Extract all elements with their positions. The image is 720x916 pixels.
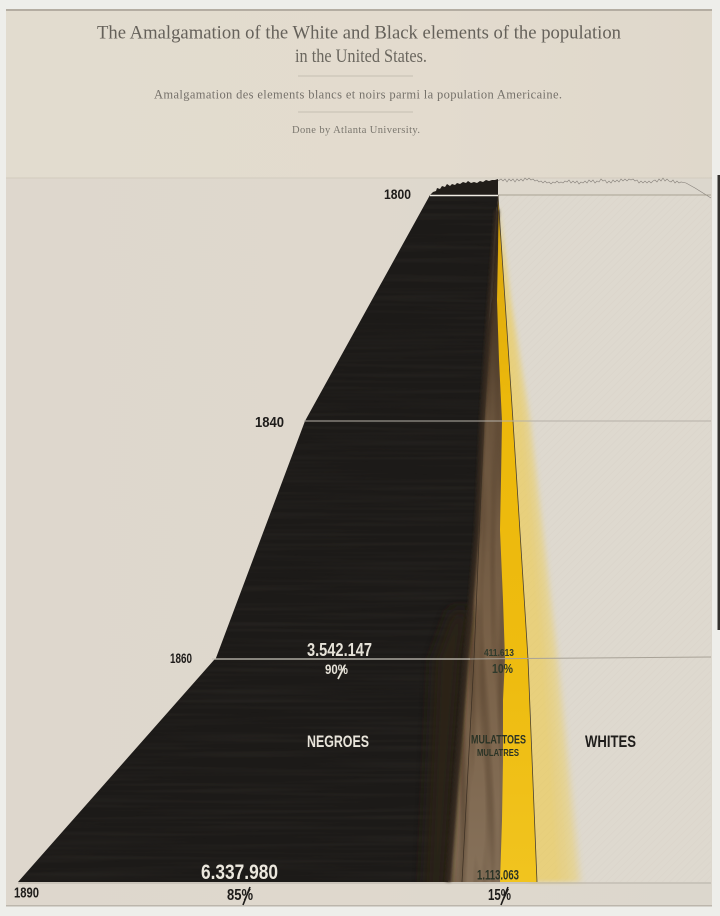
pale yellow wash — [499, 205, 583, 882]
mulatto brown band — [440, 195, 506, 882]
wavy white top outline — [498, 178, 711, 198]
1890 negro population: 6.337.980 — [201, 861, 278, 884]
title: The Amalgamation of the White and Black elements of the population — [97, 24, 621, 44]
year rule 1800 — [430, 194, 498, 196]
1860 mulatto population — [484, 647, 514, 676]
inner pencil line in brown band — [462, 195, 498, 882]
chart: population streams — [18, 178, 711, 900]
year label 1800: 1800 — [384, 186, 411, 202]
1860 negro population — [307, 640, 372, 679]
1860 negro population: 3.542.147 — [307, 640, 372, 660]
strong yellow band — [497, 195, 537, 882]
label: mulattoes — [471, 734, 526, 759]
label: negroes: NEGROES — [307, 732, 369, 751]
label: mulattoes: MULATTOES — [471, 734, 526, 746]
title — [97, 24, 621, 67]
jagged top of 1800 block — [430, 179, 498, 195]
1860 negro population: 90% — [325, 661, 348, 677]
1890 negro percentage: 85% — [227, 887, 253, 904]
year rule 1860 — [212, 657, 711, 659]
year label 1840: 1840 — [255, 415, 284, 431]
year label 1860: 1860 — [170, 650, 192, 666]
whites stream with hatching — [498, 195, 711, 882]
soft edge black to brown — [424, 610, 470, 900]
label: mulattoes: MULATRES — [477, 748, 519, 759]
baseline 1890 — [18, 882, 711, 884]
label: whites: WHITES — [585, 732, 636, 751]
1860 mulatto population: 10% — [492, 661, 513, 676]
credit: Done by Atlanta University. — [292, 125, 420, 136]
year rule 1840 — [304, 420, 711, 422]
1860 mulatto population: 411.613 — [484, 647, 514, 659]
French subtitle: Amalgamation des elements blancs et noirs parmi la population Americaine. — [154, 88, 562, 102]
negroes stream — [18, 195, 498, 882]
title: in the United States. — [295, 47, 427, 67]
year label 1890: 1890 — [14, 886, 39, 902]
thin line at yellow edge — [498, 195, 537, 882]
1890 mulatto population: 1.113.063 — [477, 866, 519, 882]
1890 mulatto percentage: 15% — [488, 887, 511, 904]
